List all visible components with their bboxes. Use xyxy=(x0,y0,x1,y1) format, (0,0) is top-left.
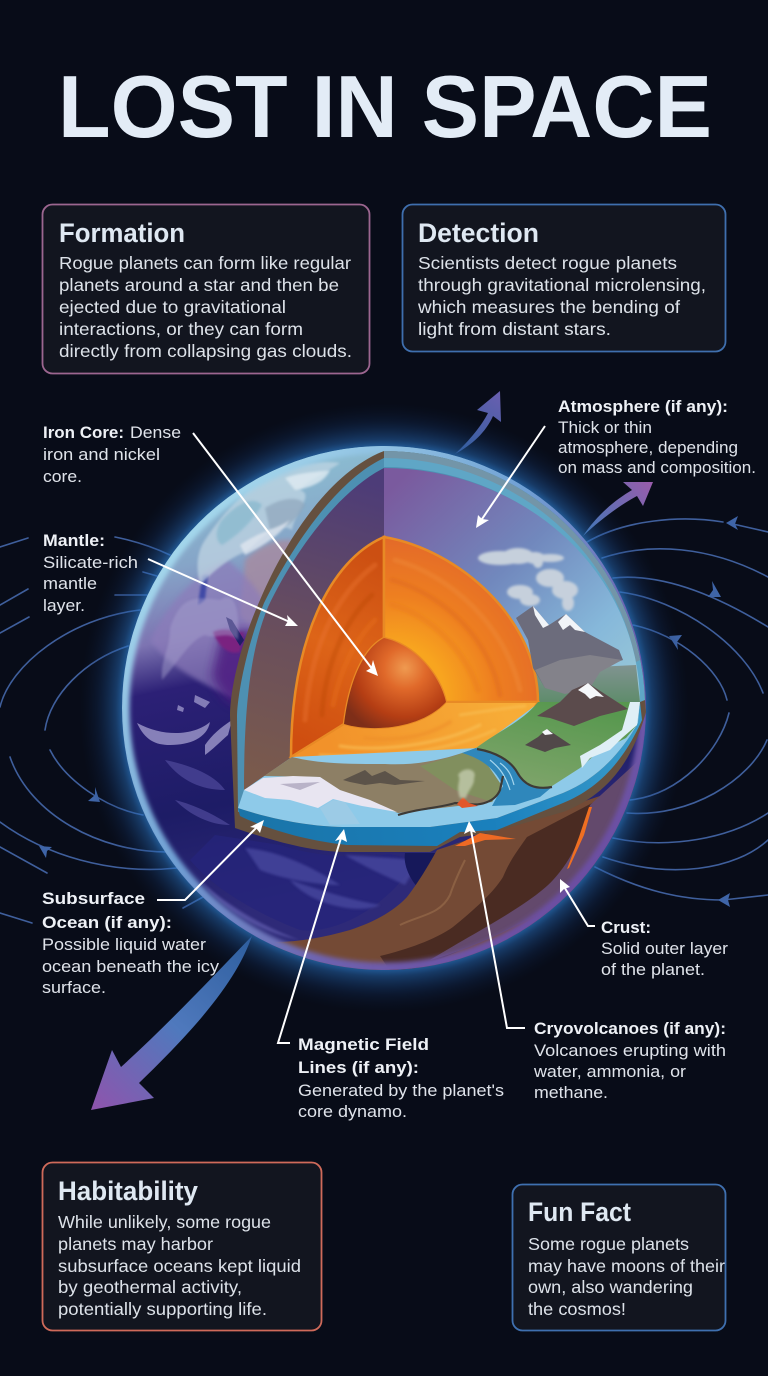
panel: detection: which measures the bending of xyxy=(417,297,680,317)
label: crust: Solid outer layer xyxy=(601,939,728,958)
label: subsurface ocean: Possible liquid water xyxy=(42,935,206,954)
label: iron core xyxy=(43,423,181,486)
panel: formation: Rogue planets can form like regular xyxy=(59,253,351,273)
rocky section xyxy=(275,774,638,970)
label: atmosphere: atmosphere, depending xyxy=(558,438,738,457)
lava under the shell xyxy=(455,833,516,846)
panel: detection: light from distant stars. xyxy=(418,319,611,339)
panel: fun fact: own, also wandering xyxy=(528,1277,693,1297)
deep blue ocean rim xyxy=(238,702,642,846)
label: cryovolcanoes xyxy=(533,1019,726,1102)
label: magnetic field lines: Magnetic Field xyxy=(298,1035,429,1054)
panel: formation: Formation xyxy=(59,218,185,248)
inner iron core xyxy=(344,638,446,728)
ground: green plain xyxy=(476,702,640,788)
label: subsurface ocean: ocean beneath the icy xyxy=(42,957,220,976)
panel: habitability xyxy=(42,1162,322,1330)
planet glow xyxy=(79,403,689,1013)
floor swirls xyxy=(320,706,525,756)
label: cryovolcanoes: methane. xyxy=(534,1083,608,1102)
atmospheric limb xyxy=(124,448,644,968)
label: mantle: Mantle: xyxy=(43,531,105,550)
label: magnetic field lines xyxy=(298,1035,504,1121)
label: subsurface ocean: surface. xyxy=(42,978,106,997)
panel: formation xyxy=(42,204,370,374)
panel: fun fact xyxy=(512,1184,726,1330)
dark shoreline xyxy=(398,749,552,815)
planet cutaway illustration xyxy=(122,446,660,1000)
mantle floor xyxy=(291,702,538,764)
label: iron core: Dense xyxy=(130,423,181,442)
label: mantle xyxy=(43,531,138,615)
label: mantle: layer. xyxy=(43,596,85,615)
small mountain xyxy=(525,729,571,752)
label: iron core: core. xyxy=(43,467,82,486)
label: crust: Crust: xyxy=(601,918,651,937)
panel: habitability: subsurface oceans kept liquid xyxy=(58,1256,301,1276)
ice on green shelf xyxy=(580,702,640,768)
label: crust: of the planet. xyxy=(601,960,705,979)
label: atmosphere: on mass and composition. xyxy=(558,458,756,477)
magnetic field lines xyxy=(0,516,768,923)
panel: formation: directly from collapsing gas clouds. xyxy=(59,341,352,361)
mountains on khaki plain xyxy=(343,770,425,785)
back wall: left xyxy=(244,468,384,790)
clouds xyxy=(478,548,578,611)
arrow: mantle xyxy=(148,559,298,626)
panel: fun fact: Some rogue planets xyxy=(528,1234,689,1254)
panel: detection: through gravitational microlensing, xyxy=(418,275,706,295)
label: iron core: iron and nickel xyxy=(43,445,160,464)
ground: khaki plain xyxy=(264,748,502,813)
label: mantle: mantle xyxy=(43,574,97,593)
arrow: cryovolcanoes xyxy=(464,821,525,1028)
arrow: escaping trajectory top xyxy=(455,391,501,454)
arrow: crust xyxy=(560,879,595,926)
panel: habitability: potentially supporting life. xyxy=(58,1299,267,1319)
panel: habitability: by geothermal activity, xyxy=(58,1277,242,1297)
label: cryovolcanoes: Volcanoes erupting with xyxy=(534,1041,726,1060)
clouds, lower left xyxy=(190,835,296,870)
clouds, upper left xyxy=(198,462,340,585)
panel: fun fact: may have moons of their xyxy=(528,1256,725,1276)
label: atmosphere xyxy=(558,397,756,477)
ice sheet xyxy=(244,776,397,812)
arrow: escaping trajectory right xyxy=(583,482,653,536)
front mountain xyxy=(537,683,628,726)
planet surface: ocean, clouds and rock xyxy=(122,446,660,1000)
mantle: right face xyxy=(384,537,538,702)
panel: detection: Detection xyxy=(418,218,539,248)
label: crust xyxy=(601,918,728,979)
river xyxy=(462,748,552,806)
panel: habitability: While unlikely, some rogue xyxy=(58,1212,271,1232)
label: cryovolcanoes: Cryovolcanoes (if any): xyxy=(534,1019,726,1038)
arrow: escaping trajectory bottom left xyxy=(91,936,252,1110)
panel: formation: ejected due to gravitational xyxy=(59,297,286,317)
label: atmosphere: Atmosphere (if any): xyxy=(558,397,728,416)
mantle swirls xyxy=(305,560,520,720)
back mountains xyxy=(516,606,623,692)
panel: habitability: Habitability xyxy=(58,1176,198,1206)
panel: habitability: planets may harbor xyxy=(58,1234,213,1254)
mantle: left face xyxy=(291,537,384,757)
label: cryovolcanoes: water, ammonia, or xyxy=(533,1062,686,1081)
back wall: right xyxy=(384,468,640,702)
label: magnetic field lines: Generated by the planet's xyxy=(298,1081,504,1100)
label: atmosphere: Thick or thin xyxy=(558,418,652,437)
blue shell band xyxy=(237,458,640,812)
clouds, mid left xyxy=(137,722,210,745)
arrow: atmosphere xyxy=(476,426,545,528)
panel: fun fact: the cosmos! xyxy=(528,1299,626,1319)
panel: detection: Scientists detect rogue planets xyxy=(418,253,677,273)
label: subsurface ocean: Ocean (if any): xyxy=(42,913,172,932)
arrow: magnetic field lines xyxy=(278,829,347,1043)
panel: formation: planets around a star and then be xyxy=(59,275,339,295)
small volcano with plume xyxy=(457,797,478,808)
title: LOST IN SPACE xyxy=(58,57,712,156)
label: subsurface ocean: Subsurface xyxy=(42,889,145,908)
arrow: iron core xyxy=(193,433,378,676)
label: subsurface ocean xyxy=(42,889,220,997)
ice shelf surface xyxy=(238,702,640,827)
crust shell of the cutaway xyxy=(230,451,646,852)
label: mantle: Silicate-rich xyxy=(43,553,138,572)
panel: fun fact: Fun Fact xyxy=(528,1197,631,1227)
label: iron core: Iron Core: xyxy=(43,423,124,442)
horizon ground behind mountains xyxy=(533,665,640,702)
arrow: subsurface ocean xyxy=(157,820,264,900)
label: magnetic field lines: Lines (if any): xyxy=(298,1058,419,1077)
panel: detection xyxy=(402,204,726,352)
label: magnetic field lines: core dynamo. xyxy=(298,1102,407,1121)
panel: formation: interactions, or they can form xyxy=(59,319,303,339)
